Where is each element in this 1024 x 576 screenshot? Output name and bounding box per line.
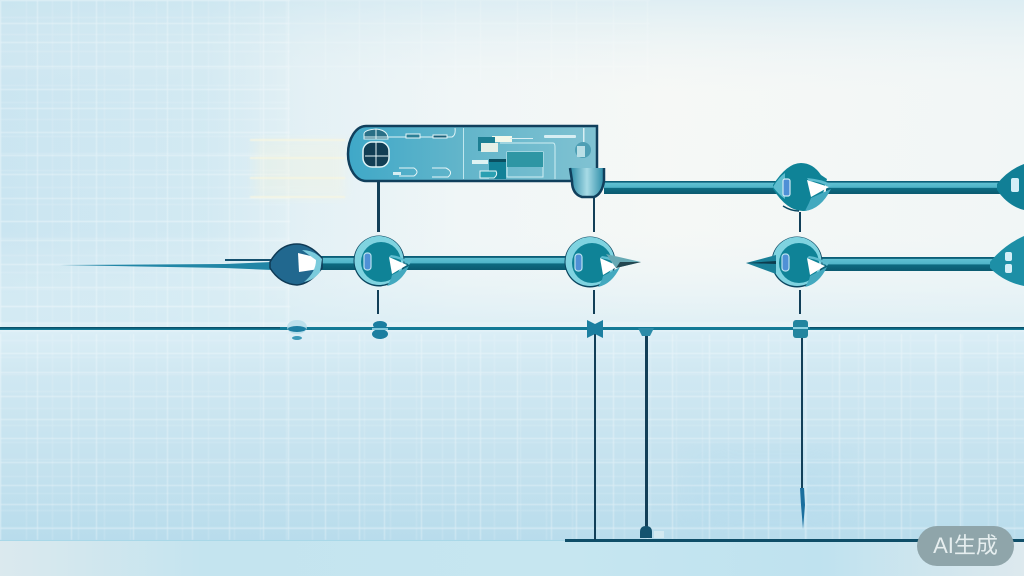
pipe row 1 — [604, 181, 1002, 194]
badge: AI generated — [917, 526, 1014, 566]
center block — [472, 136, 555, 179]
badge: AI generated: AI生成 — [933, 533, 998, 558]
foot marker — [640, 526, 664, 538]
node: top right edge — [997, 164, 1024, 210]
small gauges — [393, 134, 451, 177]
pipe row 2 right — [820, 257, 1000, 271]
icon: panel window — [363, 128, 455, 167]
panel body — [348, 126, 597, 181]
control panel — [348, 126, 604, 197]
coupling — [570, 168, 604, 197]
pipe row 2 left — [316, 256, 576, 270]
valve: dark blue inlet — [270, 244, 322, 285]
bottom baseline — [565, 539, 1024, 542]
divider — [463, 128, 464, 179]
right controls — [510, 128, 591, 158]
node: row 2 first — [354, 236, 413, 286]
spike on vertical line — [800, 488, 805, 529]
node: row 2 right with left tip — [746, 236, 831, 288]
dark bottom edge of panel — [366, 180, 570, 182]
node: lower right edge — [990, 236, 1024, 286]
vertical connectors — [377, 182, 803, 540]
node: row 1 — [773, 163, 833, 211]
background lower — [0, 330, 1024, 542]
main horizontal line — [0, 327, 1024, 330]
junctions on main line — [287, 320, 307, 340]
node: row 2 second with tip — [564, 236, 641, 288]
background upper — [0, 0, 1024, 330]
inlet line left — [60, 259, 275, 270]
